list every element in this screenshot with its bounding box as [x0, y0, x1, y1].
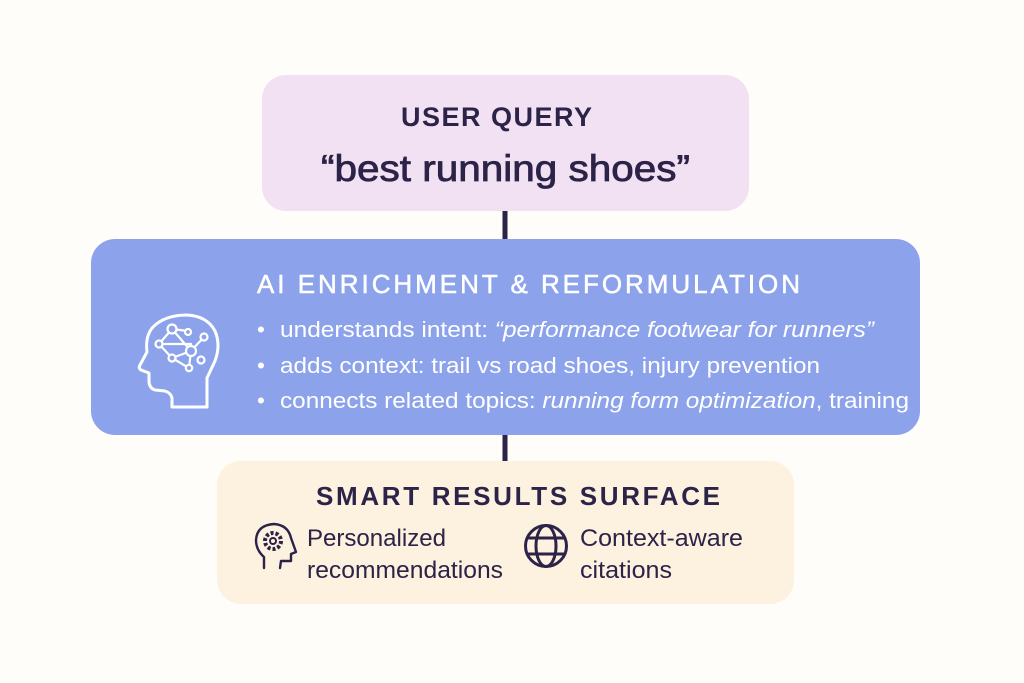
icon: globe [526, 526, 566, 566]
bullet list [257, 317, 909, 413]
label: context-aware citations: citations [580, 557, 672, 584]
icon: head with gear [256, 524, 296, 568]
bullet: context: • [257, 353, 265, 378]
bullet: topics: • [257, 388, 265, 413]
heading: smart results: SMART RESULTS SURFACE [316, 481, 720, 511]
label: context-aware citations [580, 525, 743, 584]
label: personalized recommendations: Personalized [307, 525, 446, 552]
icon: head with network [139, 315, 218, 407]
heading: AI enrichment: AI ENRICHMENT & REFORMULATION [257, 269, 800, 299]
bullet text: context: adds context: trail vs road shoes, injury prevention [280, 353, 820, 378]
bullet text: intent: understands intent: “performance footwear for runners” [280, 317, 876, 342]
panel: user query [262, 75, 749, 211]
label: personalized recommendations [307, 525, 503, 584]
heading: user query: USER QUERY [401, 102, 592, 132]
label: personalized recommendations: recommendations [307, 557, 503, 584]
label: context-aware citations: Context-aware [580, 525, 743, 552]
bullet: intent: • [257, 317, 265, 342]
query text: “best running shoes” [321, 148, 690, 189]
panel: AI enrichment [91, 239, 920, 435]
connector: enrichment to results [502, 428, 508, 468]
bullet text: topics: connects related topics: running form optimization , training [280, 388, 909, 413]
panel: smart results [217, 461, 794, 604]
connector: query to enrichment [502, 205, 508, 245]
